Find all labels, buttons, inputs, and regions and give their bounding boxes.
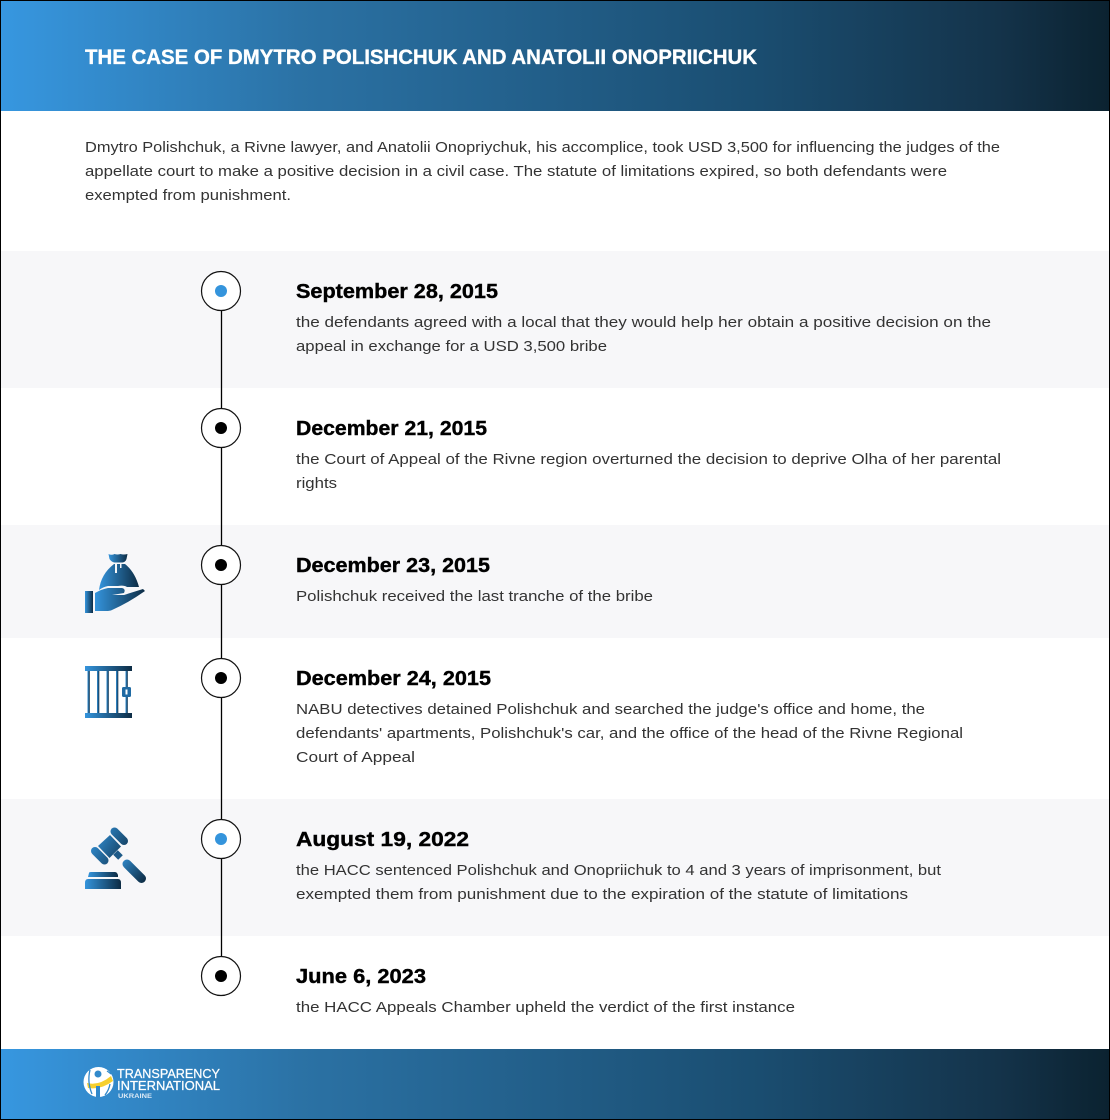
intro text: Dmytro Polishchuk, a Rivne lawyer, and Anatolii Onopriychuk, his accomplice, took USD 3,500 for influencing the judges of the — [85, 139, 1000, 156]
entry: September 28, 2015: the defendants agreed with a local that they would help her obtain a positive decision on the — [296, 314, 991, 331]
logo: Transparency International Ukraine: TRANSPARENCY — [117, 1066, 220, 1081]
row background: September 28, 2015 — [0, 251, 1110, 388]
entry: June 6, 2023: the HACC Appeals Chamber upheld the verdict of the first instance — [296, 999, 795, 1016]
icon: prison bars — [85, 666, 132, 718]
logo: Transparency International Ukraine: INTERNATIONAL — [117, 1078, 220, 1093]
timeline node: June 6, 2023 — [202, 956, 240, 996]
intro text — [85, 139, 1000, 204]
entry: December 24, 2015: NABU detectives detained Polishchuk and searched the judge's office and home, the — [296, 701, 925, 718]
icon: judge gavel — [85, 832, 142, 889]
logo: Transparency International Ukraine — [84, 1066, 220, 1100]
timeline line — [220, 291, 222, 976]
intro text: appellate court to make a positive decision in a civil case. The statute of limitations expired, so both defendants were — [85, 163, 947, 180]
entry: December 21, 2015: rights — [296, 475, 337, 492]
timeline node: August 19, 2022 — [202, 820, 240, 858]
footer banner — [0, 1049, 1110, 1120]
entry: August 19, 2022: August 19, 2022 — [296, 828, 469, 851]
entry: June 6, 2023 — [296, 965, 795, 1016]
timeline node: December 23, 2015 — [202, 546, 240, 584]
entry: December 23, 2015: December 23, 2015 — [296, 554, 490, 577]
entry: December 23, 2015 — [296, 554, 653, 605]
entry: December 24, 2015: Court of Appeal — [296, 749, 415, 766]
entry: June 6, 2023: June 6, 2023 — [296, 965, 426, 988]
entry: December 24, 2015 — [296, 667, 963, 766]
icon: money bag in hand — [85, 554, 145, 613]
row background: December 23, 2015 — [0, 525, 1110, 638]
row background: August 19, 2022 — [0, 799, 1110, 936]
timeline node: December 24, 2015 — [202, 658, 240, 698]
entry: December 21, 2015 — [296, 417, 1001, 492]
logo: Transparency International Ukraine: UKRAINE — [118, 1093, 153, 1100]
title: THE CASE OF DMYTRO POLISHCHUK AND ANATOLII ONOPRIICHUK — [85, 46, 757, 69]
intro text: exempted from punishment. — [85, 187, 291, 204]
entry: August 19, 2022 — [296, 828, 942, 903]
entry: September 28, 2015 — [296, 280, 991, 355]
entry: December 21, 2015: the Court of Appeal of the Rivne region overturned the decision to deprive Olha of her parental — [296, 451, 1001, 468]
entry: August 19, 2022: exempted them from punishment due to the expiration of the statute of limitations — [296, 886, 908, 903]
header banner — [0, 0, 1110, 111]
entry: September 28, 2015: appeal in exchange for a USD 3,500 bribe — [296, 338, 607, 355]
timeline node: September 28, 2015 — [202, 272, 240, 310]
timeline node: December 21, 2015 — [202, 408, 240, 448]
entry: December 23, 2015: Polishchuk received the last tranche of the bribe — [296, 588, 653, 605]
entry: December 24, 2015: December 24, 2015 — [296, 667, 491, 690]
entry: September 28, 2015: September 28, 2015 — [296, 280, 498, 303]
entry: August 19, 2022: the HACC sentenced Polishchuk and Onopriichuk to 4 and 3 years of imprisonment, but — [296, 862, 942, 879]
entry: December 21, 2015: December 21, 2015 — [296, 417, 487, 440]
entry: December 24, 2015: defendants' apartments, Polishchuk's car, and the office of the head of the Rivne Regional — [296, 725, 963, 742]
